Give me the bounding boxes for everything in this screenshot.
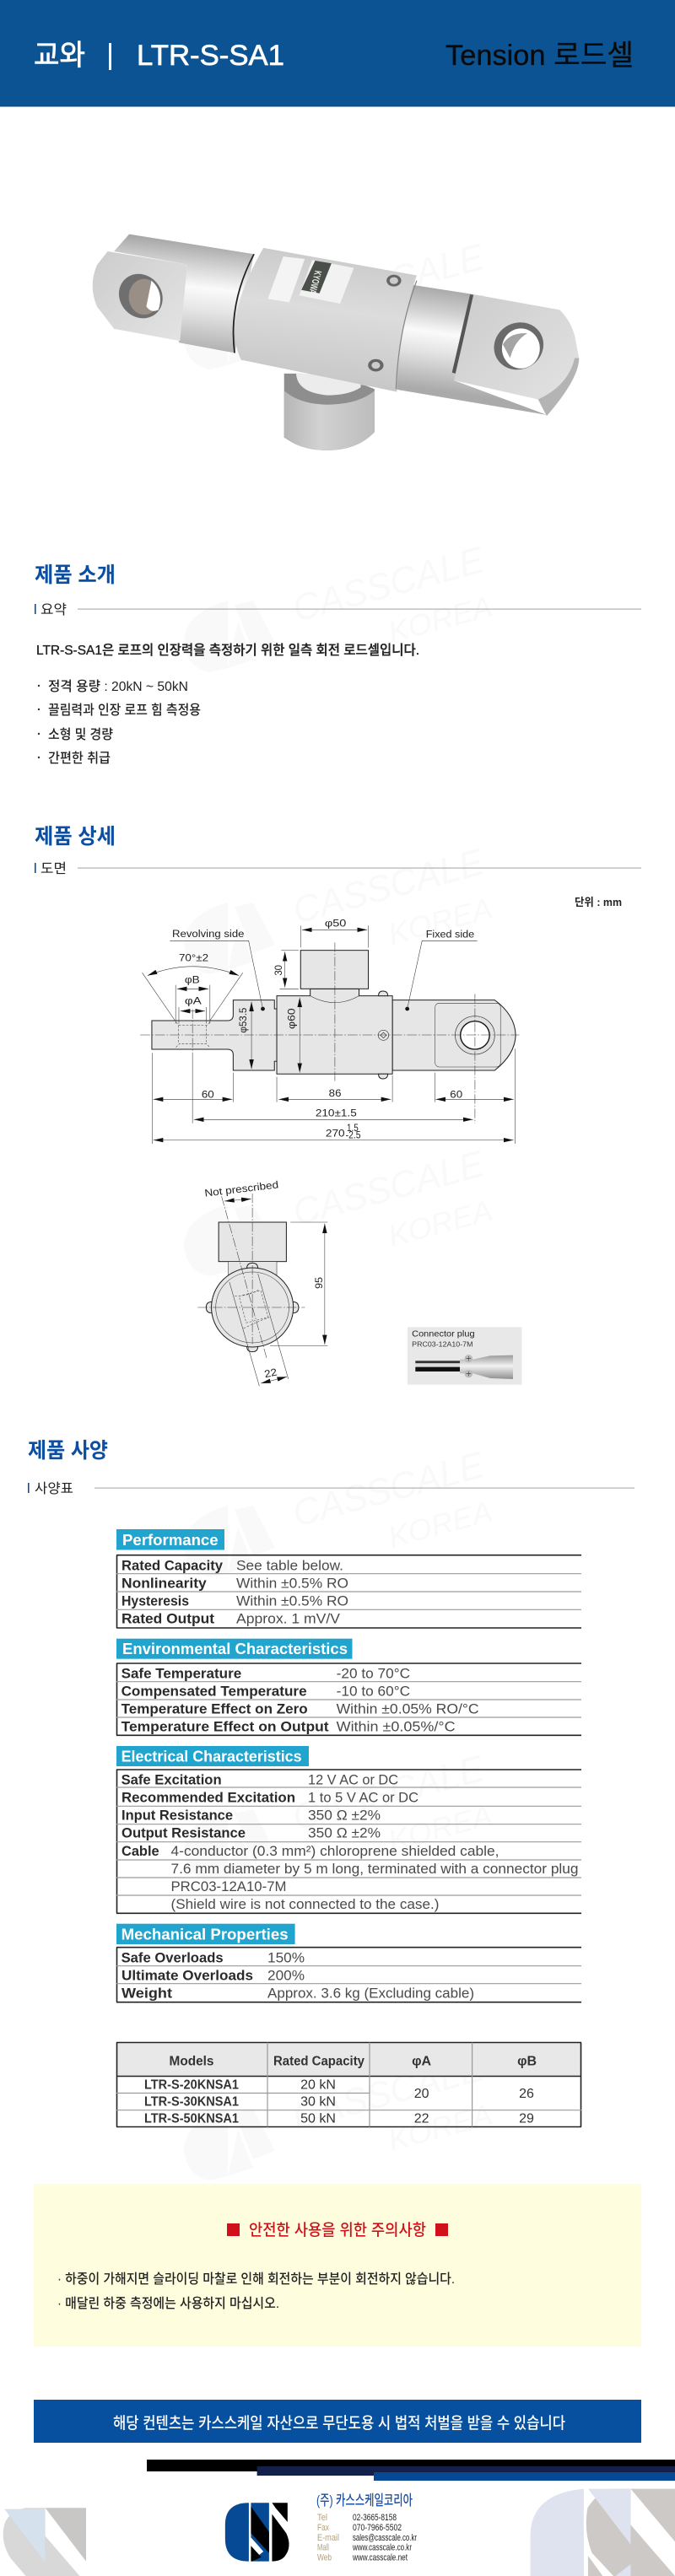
watermark 1 xyxy=(184,236,496,369)
spec panel: performance: See table below. xyxy=(236,1558,343,1574)
watermark 6: CASSCALE xyxy=(289,1748,489,1839)
caution items xyxy=(57,2272,455,2311)
body diameters φ53.5 and φ60: φ53.5 xyxy=(237,1007,249,1033)
table body rows xyxy=(144,2078,534,2126)
feature list: 정격 용량 : 20kN ~ 50kN xyxy=(48,679,188,694)
length dimensions: 210±1.5 xyxy=(316,1107,357,1118)
watermark 2: KOREA xyxy=(385,590,496,649)
angle dimension 70°±2 xyxy=(143,952,243,1021)
spec panel: environmental characteristics: -10 to 60°C xyxy=(337,1683,410,1699)
leader labels: Fixed side xyxy=(426,929,474,940)
spec panel: performance: Nonlinearity xyxy=(122,1576,207,1592)
right cylinder xyxy=(394,284,547,415)
connector plug panel: Connector plug xyxy=(412,1329,475,1339)
watermark 4 xyxy=(184,1143,496,1276)
watermark 5: CASSCALE xyxy=(289,1444,489,1535)
caution items: · 매달린 하중 측정에는 사용하지 마십시오. xyxy=(57,2296,279,2311)
watermark 2: CASSCALE xyxy=(289,539,489,630)
spec panel: electrical characteristics xyxy=(116,1746,581,1913)
sub heading: 사양표: 사양표 xyxy=(35,1481,73,1496)
section heading: 제품 소개: 제품 소개 xyxy=(35,563,116,587)
spec panel: electrical characteristics: 4-conductor (0.3 mm²) chloroprene shielded cable, xyxy=(170,1843,500,1859)
company contact block: Fax xyxy=(317,2523,329,2533)
left lug face and hole xyxy=(93,251,187,341)
spec panel: mechanical properties: 150% xyxy=(267,1950,305,1966)
spec panel: mechanical properties: Weight xyxy=(122,1986,172,2002)
section heading: 제품 사양: 제품 사양 xyxy=(28,1439,108,1463)
spec panel: mechanical properties: Safe Overloads xyxy=(122,1950,224,1966)
spec panel: electrical characteristics: Electrical Characteristics xyxy=(122,1748,302,1765)
title: brand and model: 교와 xyxy=(34,40,85,72)
watermark 5: KOREA xyxy=(385,1495,496,1555)
right lug face and hole xyxy=(454,294,579,416)
spec panel: environmental characteristics: Temperature Effect on Output xyxy=(122,1719,329,1735)
table header row xyxy=(169,2054,537,2068)
length dimensions: -2.5 xyxy=(346,1129,361,1141)
spec panel: mechanical properties: Approx. 3.6 kg (Excluding cable) xyxy=(267,1986,474,2002)
screws xyxy=(368,275,402,371)
footer corner decoration left xyxy=(3,2508,86,2576)
company contact block: (주) 카스스케일코리아 xyxy=(316,2492,413,2509)
spec panel: mechanical properties: Mechanical Properties xyxy=(122,1926,289,1943)
product photo: tension load cell xyxy=(93,234,579,450)
label stickers xyxy=(267,256,354,304)
leader labels xyxy=(170,928,478,1009)
watermark 6 xyxy=(184,1748,496,1881)
spec panel: environmental characteristics: Temperature Effect on Zero xyxy=(122,1700,308,1716)
watermark 7 xyxy=(184,2047,496,2180)
table header row: φB xyxy=(517,2054,537,2068)
angle dimension 70°±2: 70°±2 xyxy=(179,952,208,963)
spec panel: environmental characteristics xyxy=(116,1639,581,1735)
table body rows: 30 kN xyxy=(300,2095,336,2110)
feature list: 끌림력과 인장 로프 힘 측정용 xyxy=(48,703,201,718)
spec panel: performance: Rated Output xyxy=(122,1611,214,1627)
feature list: 간편한 취급 xyxy=(48,751,111,766)
table body rows: LTR-S-20KNSA1 xyxy=(144,2078,239,2093)
dimension 95: 95 xyxy=(313,1277,325,1289)
company contact block: E-mail xyxy=(317,2533,339,2543)
table header row: Rated Capacity xyxy=(273,2054,364,2068)
body diameters φ53.5 and φ60 xyxy=(237,998,300,1073)
footer corner decoration right xyxy=(531,2489,675,2576)
watermark 3: KOREA xyxy=(385,892,496,951)
spec panel: electrical characteristics: Cable xyxy=(122,1843,159,1859)
spec panel: mechanical properties xyxy=(116,1924,581,2002)
spec panel: electrical characteristics: Recommended Excitation xyxy=(122,1790,295,1806)
spec panel: mechanical properties: Ultimate Overloads xyxy=(122,1968,253,1984)
spec panel: performance: Within ±0.5% RO xyxy=(236,1593,348,1609)
sub heading: 요약: 요약 xyxy=(40,602,67,617)
watermark 1: KOREA xyxy=(385,287,496,347)
spec panel: performance: Hysteresis xyxy=(122,1593,189,1609)
spec panel: electrical characteristics: Output Resistance xyxy=(122,1825,246,1841)
watermark 2 xyxy=(184,539,496,672)
diameter B and A dimensions xyxy=(176,974,210,1023)
top dimensions φ50 and 30: 30 xyxy=(273,965,284,976)
sub heading: 도면: 도면 xyxy=(40,861,67,876)
title: product type: Tension 로드셀 xyxy=(446,40,634,72)
footer stripes xyxy=(147,2460,675,2481)
company contact block: 02-3665-8158 xyxy=(353,2513,397,2523)
unit note: 단위 : mm xyxy=(575,896,622,908)
table body rows: 29 xyxy=(519,2112,534,2126)
connector plug panel xyxy=(408,1327,521,1385)
dimension 22 xyxy=(261,1366,287,1383)
table body rows: LTR-S-50KNSA1 xyxy=(144,2112,239,2126)
company contact block: www.casscale.net xyxy=(352,2552,408,2563)
header band xyxy=(0,0,675,106)
watermark 3 xyxy=(184,841,496,974)
watermark 7: KOREA xyxy=(385,2098,496,2158)
spec panel: electrical characteristics: 350 Ω ±2% xyxy=(308,1808,381,1824)
spec panel: environmental characteristics: -20 to 70°C xyxy=(337,1665,410,1681)
spec panel: mechanical properties: 200% xyxy=(267,1968,305,1984)
models table xyxy=(116,2043,581,2127)
length dimensions xyxy=(152,1048,515,1144)
top dimensions φ50 and 30: φ50 xyxy=(325,918,347,929)
company contact block: sales@casscale.co.kr xyxy=(353,2533,417,2543)
dimension drawing: end view xyxy=(197,1179,521,1386)
section heading: 제품 상세: 제품 상세 xyxy=(35,825,116,849)
spec panel: performance: Performance xyxy=(122,1532,219,1549)
caution heading: 안전한 사용을 위한 주의사항 xyxy=(249,2221,426,2239)
center lines xyxy=(197,1194,305,1358)
diameter B and A dimensions: φB xyxy=(185,974,200,985)
spec panel: performance: Rated Capacity xyxy=(122,1558,224,1574)
watermark 1: CASSCALE xyxy=(289,236,489,327)
spec panel: electrical characteristics: 1 to 5 V AC or DC xyxy=(308,1790,418,1806)
company contact block xyxy=(316,2492,417,2563)
table body rows: 20 xyxy=(414,2087,429,2101)
company contact block: 070-7966-5502 xyxy=(353,2523,402,2533)
caution panel xyxy=(34,2184,641,2347)
diameter B and A dimensions: φA xyxy=(185,995,202,1007)
label stickers: KYOWA xyxy=(306,270,323,294)
table body rows: 26 xyxy=(519,2087,534,2101)
body diameters φ53.5 and φ60: φ60 xyxy=(285,1008,297,1029)
length dimensions: 1.5 xyxy=(347,1122,359,1134)
watermark 5 xyxy=(184,1444,496,1577)
spec panel: electrical characteristics: Safe Excitation xyxy=(122,1772,222,1788)
caution items: · 하중이 가해지면 슬라이딩 마찰로 인해 회전하는 부분이 회전하지 않습니다. xyxy=(57,2272,455,2287)
copyright banner xyxy=(34,2400,641,2443)
dimension 22: 22 xyxy=(263,1366,278,1380)
spec panel: electrical characteristics: 12 V AC or DC xyxy=(308,1772,398,1788)
spec panel: performance xyxy=(116,1529,581,1628)
length dimensions: 60 xyxy=(202,1089,214,1101)
spec panel: electrical characteristics: (Shield wire is not connected to the case.) xyxy=(170,1896,439,1912)
connector plug image xyxy=(415,1355,513,1379)
table body rows: 50 kN xyxy=(300,2112,336,2126)
spec panel: environmental characteristics: Compensated Temperature xyxy=(122,1683,307,1699)
dimension drawing: side view xyxy=(140,918,520,1144)
top dimensions φ50 and 30 xyxy=(273,918,369,989)
company contact block: www.casscale.co.kr xyxy=(352,2543,412,2553)
watermark 4: CASSCALE xyxy=(289,1143,489,1234)
watermark 4: KOREA xyxy=(385,1194,496,1253)
feature list xyxy=(38,679,201,766)
not prescribed note: Not prescribed xyxy=(204,1179,279,1199)
copyright banner: 해당 컨텐츠는 카스스케일 자산으로 무단도용 시 법적 처벌을 받을 수 있습니다 xyxy=(113,2414,565,2433)
title: brand and model xyxy=(34,40,284,72)
table body rows: 22 xyxy=(414,2112,429,2126)
table header row: Models xyxy=(169,2054,214,2068)
spec panel: electrical characteristics: 7.6 mm diameter by 5 m long, terminated with a connector plug xyxy=(170,1861,579,1877)
table body rows: 20 kN xyxy=(300,2078,336,2093)
spec panel: performance: Approx. 1 mV/V xyxy=(236,1611,341,1627)
intro sentence: LTR-S-SA1은 로프의 인장력을 측정하기 위한 일측 회전 로드셀입니다. xyxy=(36,643,419,658)
spec panel: electrical characteristics: Input Resistance xyxy=(122,1808,233,1824)
left cylinder xyxy=(114,234,254,353)
company contact block: Mall xyxy=(317,2543,329,2553)
spec panel: environmental characteristics: Safe Temperature xyxy=(122,1665,241,1681)
base cylinder xyxy=(284,374,375,450)
title: brand and model: LTR-S-SA1 xyxy=(137,40,284,72)
dimension 95 xyxy=(270,1222,327,1346)
length dimensions: 60 xyxy=(450,1089,462,1101)
table header row: φA xyxy=(412,2054,432,2068)
end view outline xyxy=(206,1222,299,1352)
company contact block: Tel xyxy=(317,2513,327,2523)
watermark 6: KOREA xyxy=(385,1798,496,1858)
watermark 3: CASSCALE xyxy=(289,841,489,932)
watermark 7: CASSCALE xyxy=(289,2047,489,2138)
spec panel: electrical characteristics: PRC03-12A10-7M xyxy=(170,1878,287,1894)
spec panel: electrical characteristics: 350 Ω ±2% xyxy=(308,1825,381,1841)
central body xyxy=(235,248,417,392)
length dimensions: 86 xyxy=(329,1087,342,1099)
length dimensions: 270 xyxy=(326,1127,345,1139)
center lines xyxy=(140,942,520,1124)
spec panel: environmental characteristics: Within ±0.05%/°C xyxy=(337,1719,456,1735)
spec panel: environmental characteristics: Within ±0.05% RO/°C xyxy=(337,1700,479,1716)
company logo xyxy=(225,2503,289,2562)
load cell outline xyxy=(152,951,516,1079)
table body rows: LTR-S-30KNSA1 xyxy=(144,2095,239,2110)
company contact block: Web xyxy=(317,2552,332,2563)
connector plug panel: PRC03-12A10-7M xyxy=(412,1340,473,1349)
leader labels: Revolving side xyxy=(172,928,245,940)
feature list: 소형 및 경량 xyxy=(48,727,113,742)
spec panel: environmental characteristics: Environmental Characteristics xyxy=(122,1641,348,1657)
spec panel: performance: Within ±0.5% RO xyxy=(236,1576,348,1592)
